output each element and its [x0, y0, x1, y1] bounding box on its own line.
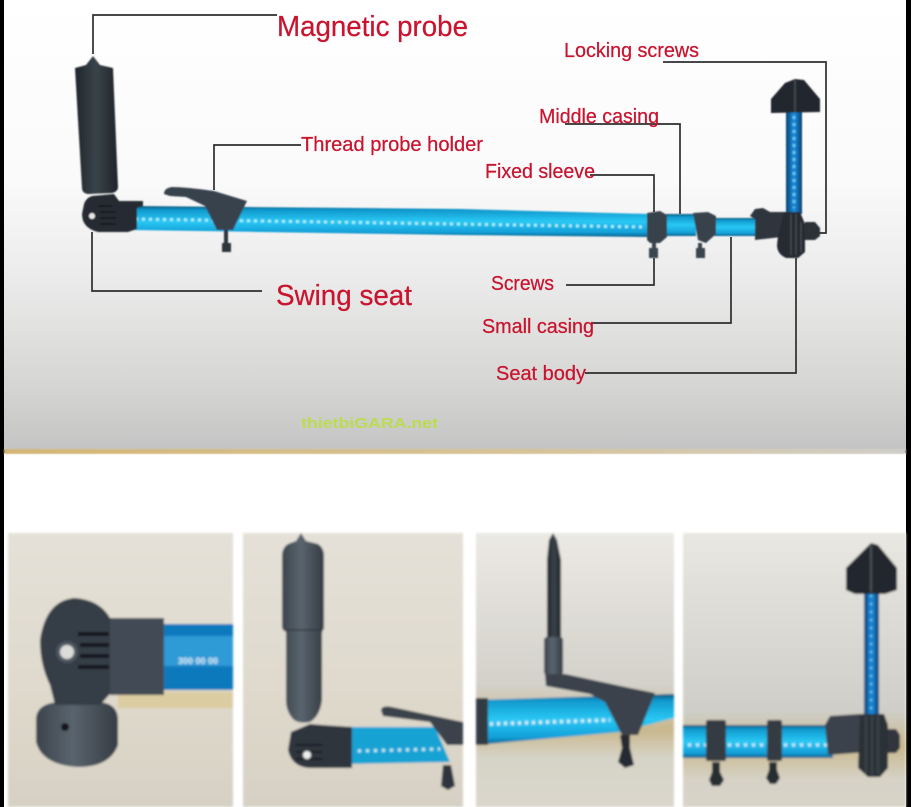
probe cylinder — [282, 533, 324, 723]
magnetic base — [36, 702, 118, 767]
seat — [288, 724, 352, 768]
swivel head — [40, 598, 164, 705]
scale band — [164, 636, 233, 666]
label: Locking screws: Locking screws — [564, 40, 699, 62]
photo background — [243, 533, 463, 807]
main blue tube — [132, 206, 650, 237]
second screw — [766, 762, 780, 784]
thread probe holder — [164, 187, 247, 230]
panel: labelled diagram — [4, 0, 906, 454]
knob — [888, 729, 900, 753]
blue tube — [683, 725, 833, 758]
photo: swing seat close-up — [8, 533, 233, 807]
casing — [110, 618, 164, 695]
leader lines — [92, 15, 826, 373]
swing seat — [82, 194, 143, 232]
seat ribs — [296, 745, 322, 759]
probe holder — [381, 706, 463, 745]
panel: white page area — [4, 453, 906, 807]
photo background — [683, 533, 906, 807]
magnetic probe — [75, 56, 118, 194]
label: Magnetic probe: Magnetic probe — [277, 11, 468, 43]
vertical scale post — [786, 112, 802, 214]
first sleeve — [706, 720, 726, 761]
blue tube — [164, 624, 233, 690]
seat bolt — [303, 751, 311, 759]
photo: thread probe holder — [476, 533, 674, 807]
middle casing tube — [666, 214, 696, 236]
base hole — [61, 723, 69, 731]
seat ribs — [98, 206, 116, 224]
disc ribs — [866, 716, 878, 775]
holder — [545, 674, 655, 735]
head ridge — [794, 80, 796, 112]
label: Middle casing: Middle casing — [539, 106, 659, 128]
bolt — [56, 641, 78, 663]
holder screw — [222, 230, 231, 252]
probe collar — [544, 637, 563, 675]
label: Fixed sleeve: Fixed sleeve — [485, 161, 595, 183]
scale marks — [688, 744, 828, 746]
vertical post — [864, 590, 879, 722]
thin probe — [547, 533, 561, 640]
scale marks — [490, 720, 610, 724]
head ridge — [870, 545, 872, 592]
middle sleeve — [693, 212, 716, 243]
blue tube — [345, 727, 450, 764]
second sleeve — [767, 720, 782, 761]
post scale marks — [792, 116, 796, 208]
seat body — [750, 208, 790, 240]
probe seam — [283, 629, 323, 631]
label: Swing seat: Swing seat — [276, 280, 412, 312]
bolt face — [60, 645, 74, 659]
tan lower edge of diagram — [4, 449, 906, 454]
swing seat bolt — [89, 213, 95, 219]
ribs — [78, 634, 109, 667]
fixed sleeve screw — [649, 243, 658, 258]
seat disc — [777, 212, 805, 258]
locking knob — [805, 222, 820, 240]
watermark: thietbiGARA.net — [301, 415, 438, 432]
scale marks on tube — [135, 219, 645, 227]
label: Seat body: Seat body — [496, 363, 586, 385]
seat disc — [858, 714, 888, 777]
first screw — [709, 762, 724, 786]
left sleeve — [476, 698, 488, 745]
middle sleeve screw — [696, 243, 705, 258]
table shadow — [118, 692, 233, 708]
scale marks — [358, 749, 440, 751]
photo background — [476, 533, 674, 807]
diagram background — [4, 0, 906, 450]
measuring arm — [75, 56, 820, 258]
small casing tube — [714, 218, 758, 236]
label: Screws: Screws — [491, 273, 554, 295]
fixed sleeve — [647, 211, 667, 243]
holder screw — [618, 735, 634, 768]
label: Thread probe holder: Thread probe holder — [301, 134, 483, 156]
photo: seat body and locking head — [683, 533, 906, 807]
disc ribs — [791, 214, 801, 255]
label: Small casing: Small casing — [482, 316, 594, 338]
post marks — [870, 595, 872, 716]
seat body — [825, 714, 868, 755]
photo background — [8, 533, 233, 807]
blue tube — [476, 694, 674, 745]
holder screw — [441, 765, 455, 790]
scale numbers: 300 00 00 — [178, 656, 218, 666]
photo: folded probe — [243, 533, 463, 807]
locking head — [771, 79, 820, 113]
locking head — [846, 543, 897, 594]
